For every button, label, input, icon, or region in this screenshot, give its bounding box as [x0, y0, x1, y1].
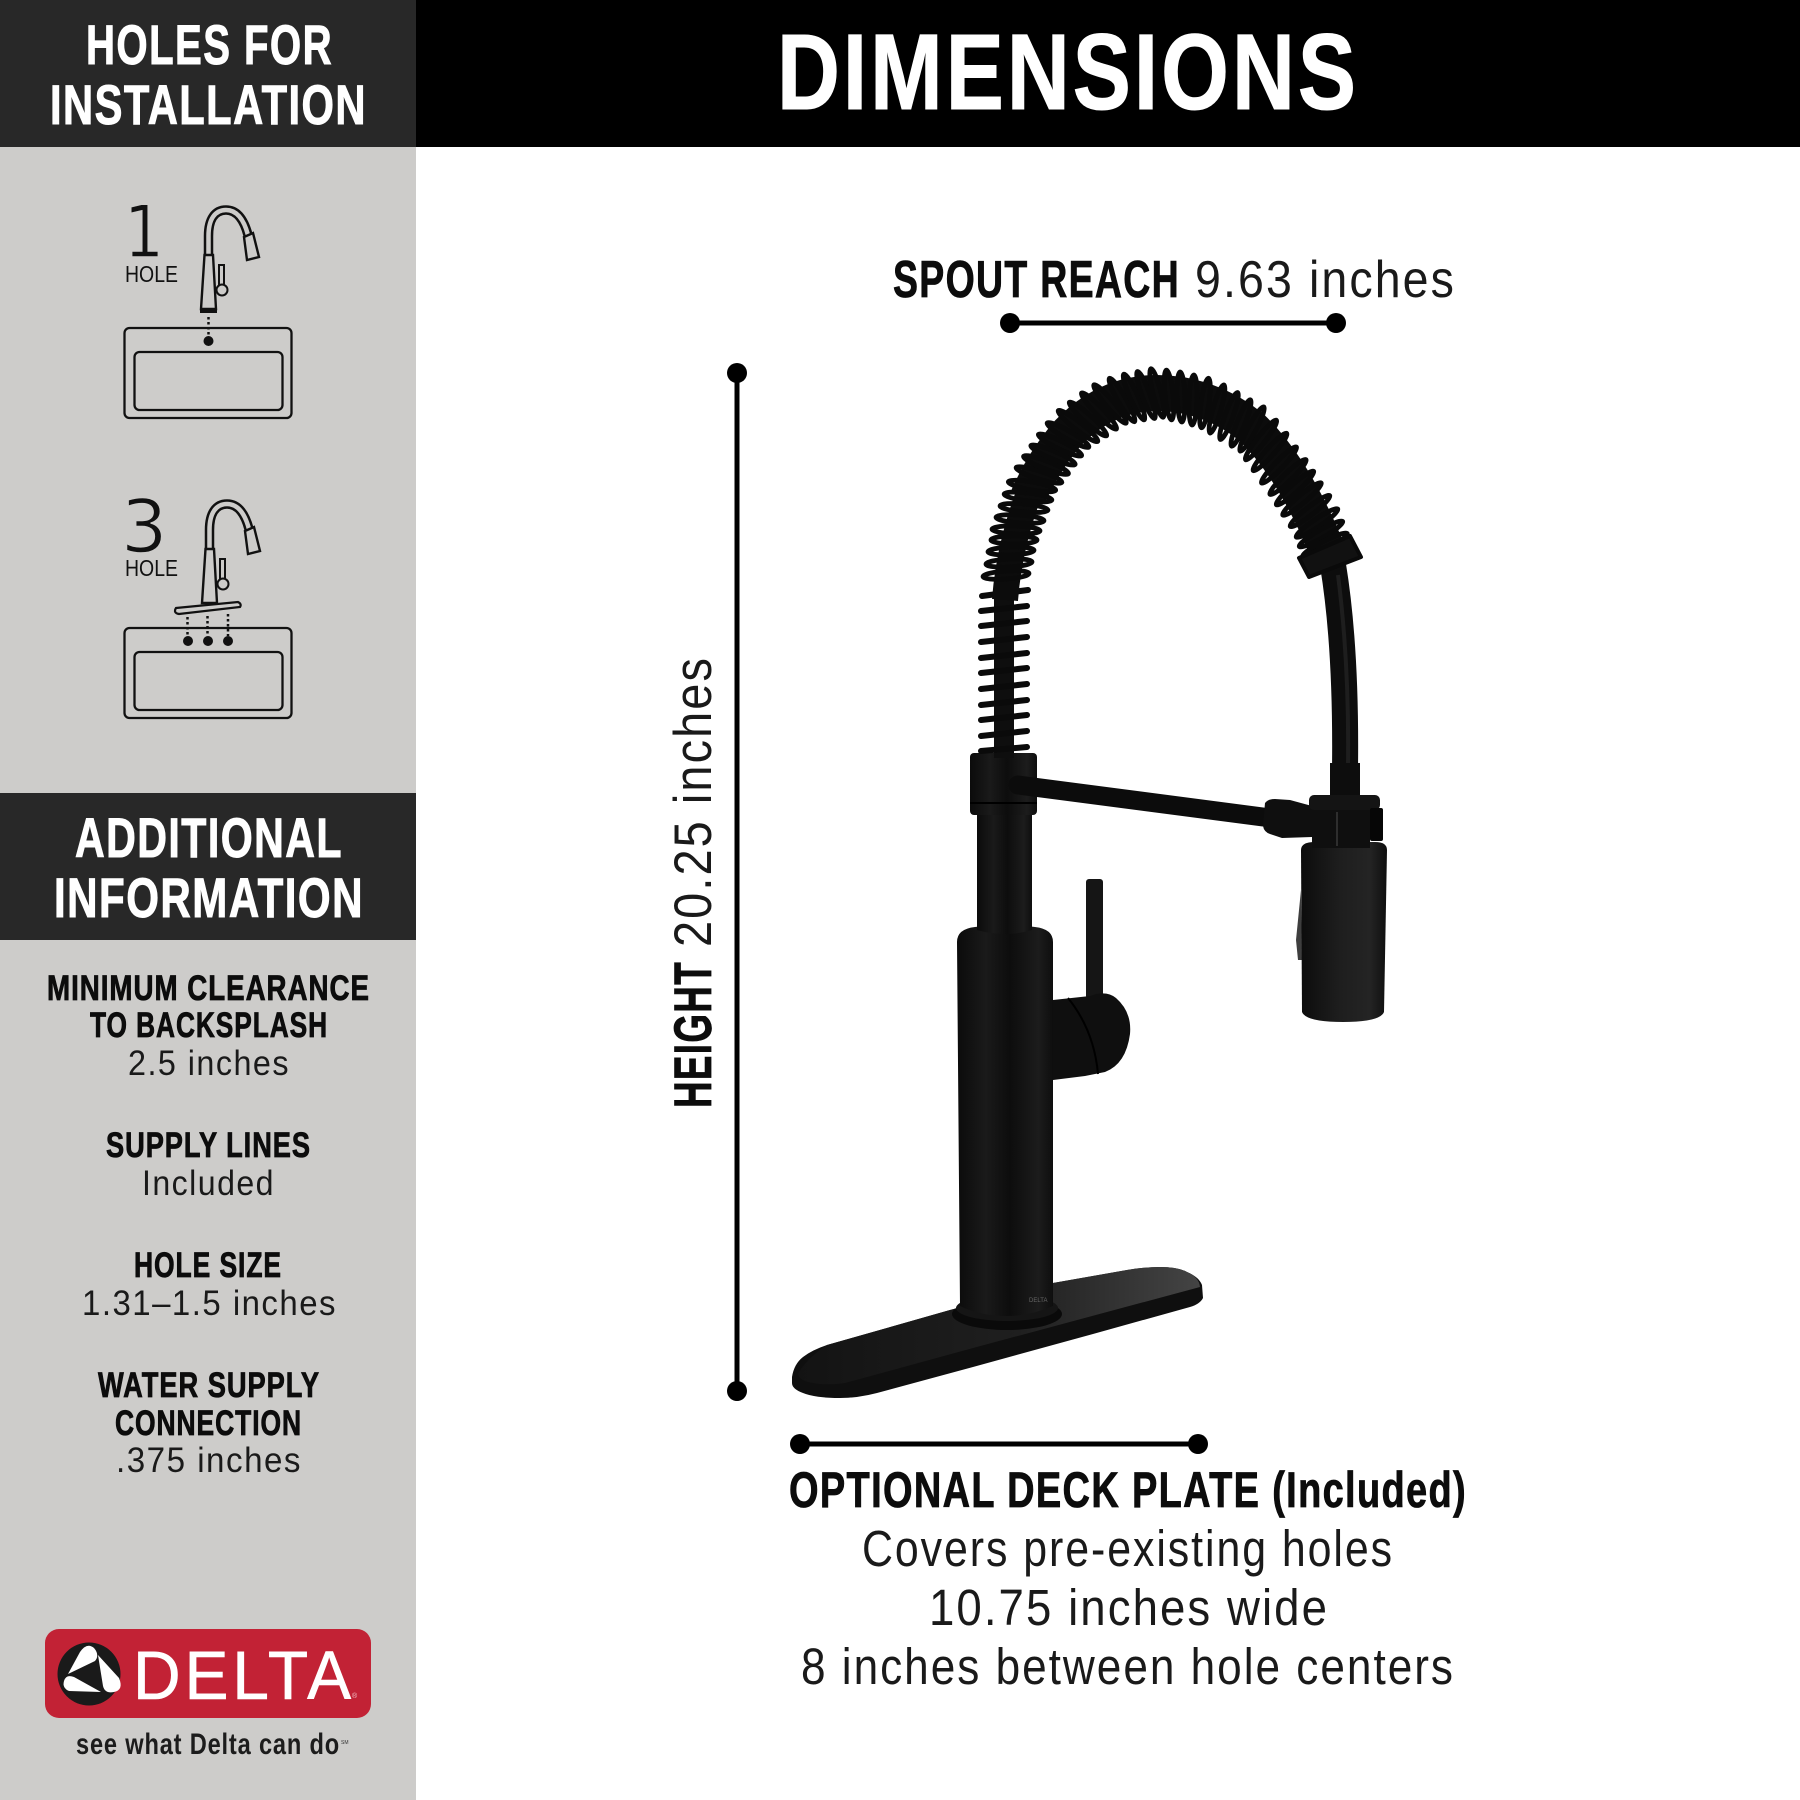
spring coils [983, 368, 1349, 581]
text: spout reach: SPOUT REACH [893, 251, 1180, 309]
heading: holes for installation: HOLES FOR [86, 13, 333, 76]
text: minimum clearance: TO BACKSPLASH [90, 1006, 328, 1045]
text: minimum clearance: 2.5 inches [128, 1044, 290, 1083]
heading: additional information: ADDITIONAL [75, 806, 343, 869]
arrow: deck plate dimension [790, 1434, 1208, 1454]
icon: three hole sink: HOLE [125, 555, 178, 581]
text: minimum clearance [47, 969, 370, 1083]
faucet spring hose [981, 368, 1349, 758]
text: water supply connection: CONNECTION [115, 1404, 302, 1443]
icon: one hole sink: 1 [124, 190, 164, 274]
text: height: HEIGHT [664, 961, 723, 1108]
text: optional deck plate: Covers pre-existing holes [862, 1520, 1394, 1577]
heading: holes for installation: INSTALLATION [50, 73, 367, 136]
icon: three hole sink: 3 [121, 485, 167, 570]
text: hole size: HOLE SIZE [134, 1246, 282, 1285]
logo: delta: see what Delta can do [76, 1728, 340, 1761]
faucet upper column and collar [970, 753, 1037, 934]
deck plate [792, 1267, 1203, 1398]
logo: delta: SM [341, 1740, 348, 1746]
text: hole size: 1.31–1.5 inches [82, 1284, 337, 1323]
logo: delta [45, 1629, 371, 1761]
faucet arm [1018, 785, 1312, 838]
icon: one hole sink [124, 190, 292, 418]
text: optional deck plate: 8 inches between hole centers [801, 1638, 1455, 1695]
heading: additional information: INFORMATION [54, 866, 364, 929]
faucet body [952, 925, 1062, 1330]
text: optional deck plate [789, 1462, 1467, 1695]
text: supply lines [106, 1126, 311, 1203]
text: supply lines: Included [142, 1164, 275, 1203]
text: water supply connection: WATER SUPPLY [98, 1366, 320, 1405]
text: supply lines: SUPPLY LINES [106, 1126, 311, 1165]
product: kitchen faucet [792, 368, 1387, 1398]
title: dimensions: DIMENSIONS [777, 11, 1359, 132]
text: height: 20.25 inches [664, 656, 723, 947]
text: height [664, 656, 723, 1108]
heading: additional information [0, 793, 416, 940]
faucet sprayer [1296, 795, 1387, 1022]
icon: one hole sink: HOLE [125, 261, 178, 287]
faucet handle [1053, 879, 1130, 1080]
logo: delta: ® [352, 1692, 358, 1700]
logo: delta: DELTA [133, 1637, 355, 1714]
icon: three hole sink [121, 485, 292, 718]
panel: dimensions header [416, 0, 1800, 147]
text: water supply connection [98, 1366, 320, 1480]
faucet smooth hose [1299, 536, 1361, 799]
text: optional deck plate: 10.75 inches wide [929, 1579, 1329, 1636]
text: optional deck plate: OPTIONAL DECK PLATE (Included) [789, 1462, 1467, 1518]
text: minimum clearance: MINIMUM CLEARANCE [47, 969, 370, 1008]
heading: holes for installation [0, 0, 416, 147]
faucet body: DELTA [1029, 1298, 1047, 1304]
arrow: spout reach dimension [1000, 313, 1346, 333]
text: hole size [82, 1246, 337, 1323]
text: spout reach: 9.63 inches [1195, 251, 1456, 309]
arrow: height dimension [727, 363, 747, 1401]
text: water supply connection: .375 inches [116, 1441, 302, 1480]
